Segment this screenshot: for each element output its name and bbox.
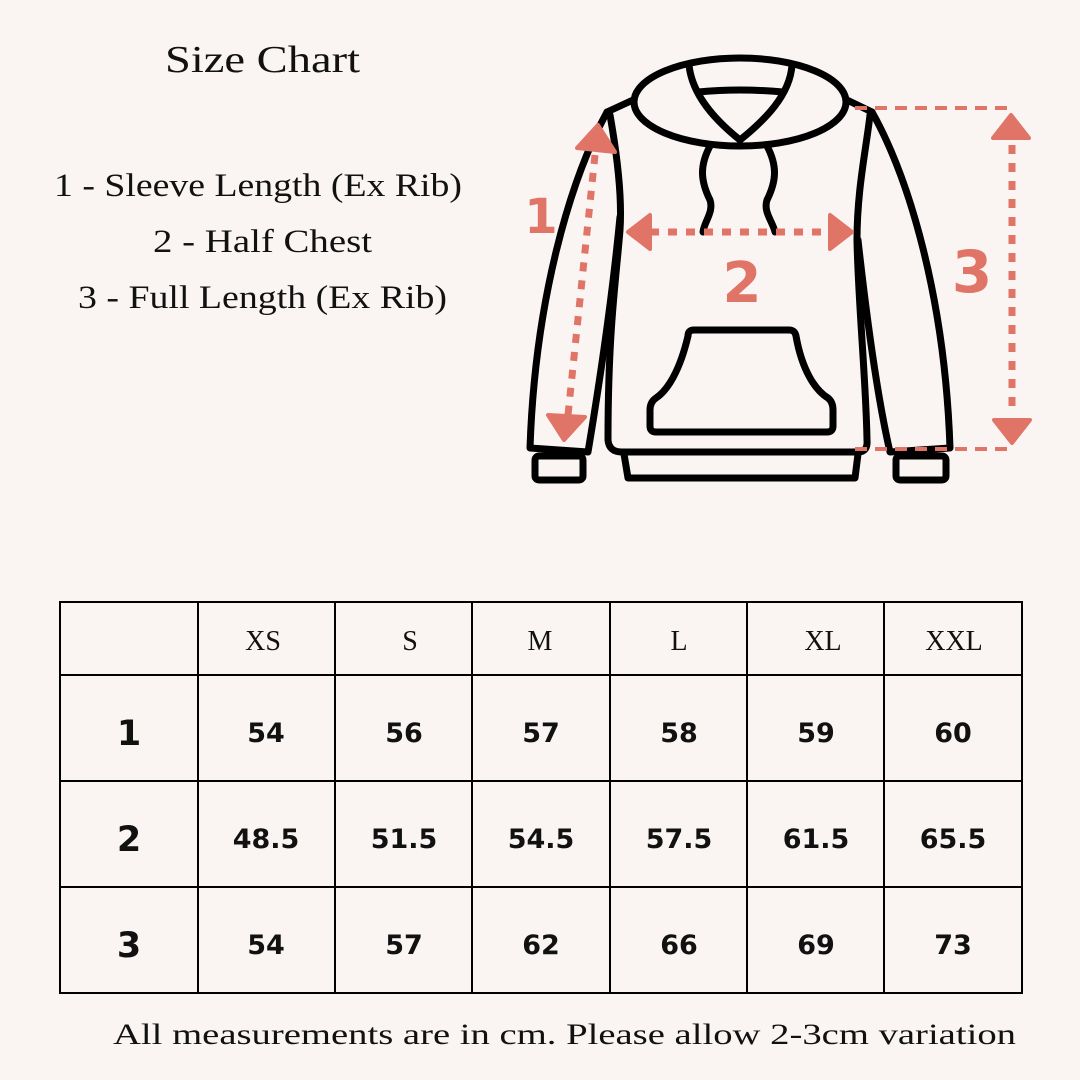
legend text: 2 - Half Chest xyxy=(153,224,372,260)
table body: 73 xyxy=(934,930,972,961)
hoodie illustration xyxy=(530,58,950,480)
left sleeve xyxy=(530,100,633,480)
table body: 1 xyxy=(117,714,141,754)
table body: 57 xyxy=(522,718,560,749)
table body: 56 xyxy=(385,718,423,749)
arrow 1 sleeve xyxy=(548,125,615,440)
table body: 51.5 xyxy=(371,824,437,855)
table body: 54.5 xyxy=(508,824,574,855)
pocket xyxy=(650,330,833,432)
footer note: All measurements are in cm. Please allow 2-3cm variation xyxy=(113,1018,1016,1051)
measurement numbers xyxy=(524,189,992,316)
table body: 54 xyxy=(247,930,285,961)
table body: 62 xyxy=(522,930,560,961)
measurement numbers: 3 xyxy=(952,238,992,306)
table body: 61.5 xyxy=(783,824,849,855)
table body: 57.5 xyxy=(646,824,712,855)
drawstrings xyxy=(702,146,711,232)
measurement numbers: 1 xyxy=(524,189,558,245)
table body: 48.5 xyxy=(233,824,299,855)
table body: 66 xyxy=(660,930,698,961)
table body: 2 xyxy=(117,820,141,860)
table header: M xyxy=(528,626,553,657)
legend text: 3 - Full Length (Ex Rib) xyxy=(78,280,447,316)
arrow 3 full length xyxy=(855,108,1030,449)
table header: L xyxy=(670,626,688,657)
hood xyxy=(634,58,846,146)
table body: 58 xyxy=(660,718,698,749)
arrow 2 chest xyxy=(628,215,852,249)
table body: 3 xyxy=(117,926,141,966)
legend text xyxy=(54,168,462,316)
table header: XS xyxy=(245,626,281,657)
table body xyxy=(117,714,986,966)
legend text: 1 - Sleeve Length (Ex Rib) xyxy=(54,168,462,204)
size table xyxy=(60,602,1022,993)
table body: 60 xyxy=(934,718,972,749)
table body: 69 xyxy=(797,930,835,961)
table body: 59 xyxy=(797,718,835,749)
right sleeve xyxy=(847,100,950,480)
body xyxy=(608,115,870,478)
measurement numbers: 2 xyxy=(723,251,761,316)
table header: XXL xyxy=(925,626,983,657)
table header: XL xyxy=(804,626,842,657)
table body: 65.5 xyxy=(920,824,986,855)
table header xyxy=(245,626,983,657)
measurement arrows xyxy=(548,108,1030,449)
table body: 54 xyxy=(247,718,285,749)
table body: 57 xyxy=(385,930,423,961)
table header: S xyxy=(402,626,418,657)
title: Size Chart xyxy=(165,39,361,81)
